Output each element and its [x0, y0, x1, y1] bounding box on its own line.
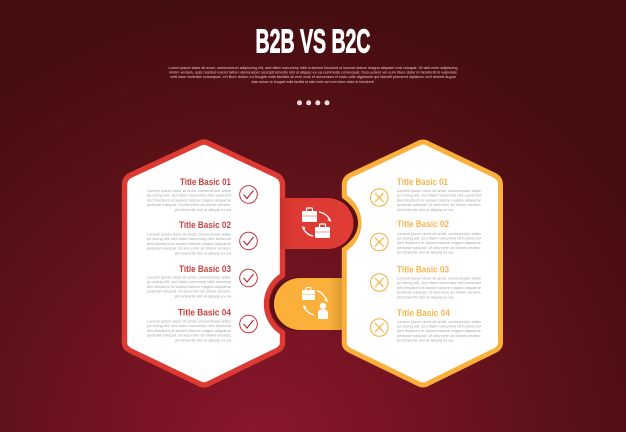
icon: check	[240, 232, 257, 250]
icon: check	[240, 269, 257, 287]
B2B item 2	[147, 220, 257, 255]
icon: cross	[370, 189, 388, 206]
B2B item 4: pe iscing elit, sed diam nonummy nibh euismod	[147, 323, 231, 328]
icon: check	[240, 186, 257, 203]
B2B item 3: pit lobeortis nisl ut aliquip ex ea	[175, 293, 232, 298]
B2B item 4: Title Basic 04	[178, 308, 231, 318]
B2B item 2: ded tincidunt ut laoreet dolore magna aliquame	[147, 241, 231, 246]
icon: cross	[370, 319, 388, 336]
B2B item 1: pit lobeortis nisl ut aliquip ex ea	[175, 207, 232, 212]
B2B item 3: pe iscing elit, sed diam nonummy nibh euismod	[147, 279, 231, 284]
B2B item 4: Loreem ipsum dolor sit amet, consectetuer adipe	[147, 318, 231, 324]
B2C item 2: pe iscing elit, sed diam nonummy nibh euismod	[397, 236, 481, 240]
connector: B2B business to business	[280, 198, 354, 249]
title: B2B VS B2C	[256, 22, 370, 60]
B2B item 1: Loreem ipsum dolor sit amet, consectetuer adipe	[147, 188, 231, 193]
B2C item 2: Title Basic 02	[397, 219, 449, 229]
B2B item 1	[147, 177, 257, 212]
B2B item 3: Title Basic 03	[179, 264, 231, 274]
B2C item 2: pit lobeortis nisl ut aliquip ex ea	[397, 250, 454, 255]
B2B item 3: Loreem ipsum dolor sit amet, consectetuer adipe	[147, 274, 231, 280]
description text: duis dolore te feugait nulla facilisi ut wisi enim ad eum iriure dolor in hendrerit.	[252, 79, 374, 84]
icon: cross	[370, 274, 388, 291]
B2B item 1: pediorat volutpat. Ut wisi enim ad minim veniam,	[147, 202, 231, 207]
B2C item 4: Title Basic 04	[397, 308, 450, 318]
B2B item 1: ded tincidunt ut laoreet dolore magna aliquame	[147, 197, 231, 202]
B2B item 2: Title Basic 02	[179, 220, 231, 230]
B2C item 4: pe iscing elit, sed diam nonummy nibh euismod	[397, 324, 481, 328]
B2C item 2: pediorat volutpat. Ut wisi enim ad minim veniam,	[397, 245, 481, 250]
icon: check	[240, 315, 257, 333]
description text: velit esse molestie consequat, vel illum dolore eu feugiat nulla facilisis at vero eros et accumsan et iusto odio dignissim qui blandit praesent luptatum zzril delenit augue	[170, 74, 457, 79]
B2C item 3: ded tincidunt ut laoreet dolore magna aliquame	[397, 285, 481, 290]
panel: B2B hexagon	[124, 142, 282, 385]
B2C item 4: ded tincidunt ut laoreet dolore magna aliquame	[397, 328, 481, 333]
B2C item 3: Loreem ipsum dolor sit amet, consectetuer adipe	[397, 276, 481, 280]
description text: Lorem ipsum dolor sit amet, consectetuer adipiscing elit, sed diam nonummy nibh euismod tincidunt ut laoreet dolore magna aliquam erat volutpat. Ut wisi enim adipiscing	[168, 65, 458, 70]
B2C item 1	[370, 177, 481, 212]
B2C item 3: Title Basic 03	[397, 264, 449, 274]
B2C item 4	[370, 308, 481, 343]
B2B item 2: pit lobeortis nisl ut aliquip ex ea	[175, 250, 232, 255]
icon: cross	[370, 233, 388, 251]
B2C item 1: pe iscing elit, sed diam nonummy nibh euismod	[397, 193, 481, 198]
B2B item 2: Loreem ipsum dolor sit amet, consectetuer adipe	[147, 232, 231, 236]
B2C item 1: Title Basic 01	[397, 177, 448, 187]
B2B item 4: ded tincidunt ut laoreet dolore magna aliquame	[147, 328, 231, 333]
B2B item 4: pit lobeortis nisl ut aliquip ex ea	[175, 337, 232, 342]
yellow connector ring	[270, 277, 306, 331]
pagination dots	[297, 100, 330, 105]
B2C item 1: pit lobeortis nisl ut aliquip ex ea	[397, 207, 454, 212]
B2C item 4: pediorat volutpat. Ut wisi enim ad minim veniam,	[397, 333, 481, 338]
B2B item 3: pediorat volutpat. Ut wisi enim ad minim veniam,	[147, 289, 231, 294]
B2B item 3	[147, 264, 257, 298]
B2B item 1: Title Basic 01	[180, 177, 231, 187]
description text	[168, 65, 458, 84]
B2C item 1: Loreem ipsum dolor sit amet, consectetuer adipe	[397, 188, 481, 193]
B2C item 1: pediorat volutpat. Ut wisi enim ad minim veniam,	[397, 202, 481, 207]
description text: minim veniam, quis nostrud exerci tation ullamcorper suscipit lobortis nisl ut aliquip ex ea commodo consequat. Duis autem vel eum iriure dolor in hendrerit in vulputate	[169, 70, 458, 75]
panel: B2C hexagon	[344, 142, 500, 385]
B2C item 3: pediorat volutpat. Ut wisi enim ad minim veniam,	[397, 290, 481, 295]
B2C item 4: pit lobeortis nisl ut aliquip ex ea	[397, 338, 454, 343]
connector: B2B business to consumer	[274, 278, 342, 330]
B2B item 1: pe iscing elit, sed diam nonummy nibh euismod	[147, 193, 231, 198]
B2B item 2: pediorat volutpat. Ut wisi enim ad minim veniam,	[147, 246, 231, 251]
B2C item 2	[370, 219, 481, 255]
B2C item 3: pit lobeortis nisl ut aliquip ex ea	[397, 294, 454, 299]
B2C item 1: ded tincidunt ut laoreet dolore magna aliquame	[397, 197, 481, 202]
B2B item 2: pe iscing elit, sed diam nonummy nibh euismod	[147, 236, 231, 241]
B2B item 3: ded tincidunt ut laoreet dolore magna aliquame	[147, 284, 231, 289]
icon: business to person	[302, 288, 328, 319]
B2C item 2: Loreem ipsum dolor sit amet, consectetuer adipe	[397, 231, 481, 236]
B2C item 3	[370, 264, 481, 299]
red connector ring	[322, 197, 358, 249]
B2C item 4: Loreem ipsum dolor sit amet, consectetuer adipe	[397, 319, 481, 324]
B2B item 4	[147, 308, 257, 342]
B2B item 4: pediorat volutpat. Ut wisi enim ad minim veniam,	[147, 333, 231, 338]
icon: briefcase exchange	[302, 208, 331, 238]
B2C item 3: pe iscing elit, sed diam nonummy nibh euismod	[397, 280, 481, 285]
B2C item 2: ded tincidunt ut laoreet dolore magna aliquame	[397, 240, 481, 245]
